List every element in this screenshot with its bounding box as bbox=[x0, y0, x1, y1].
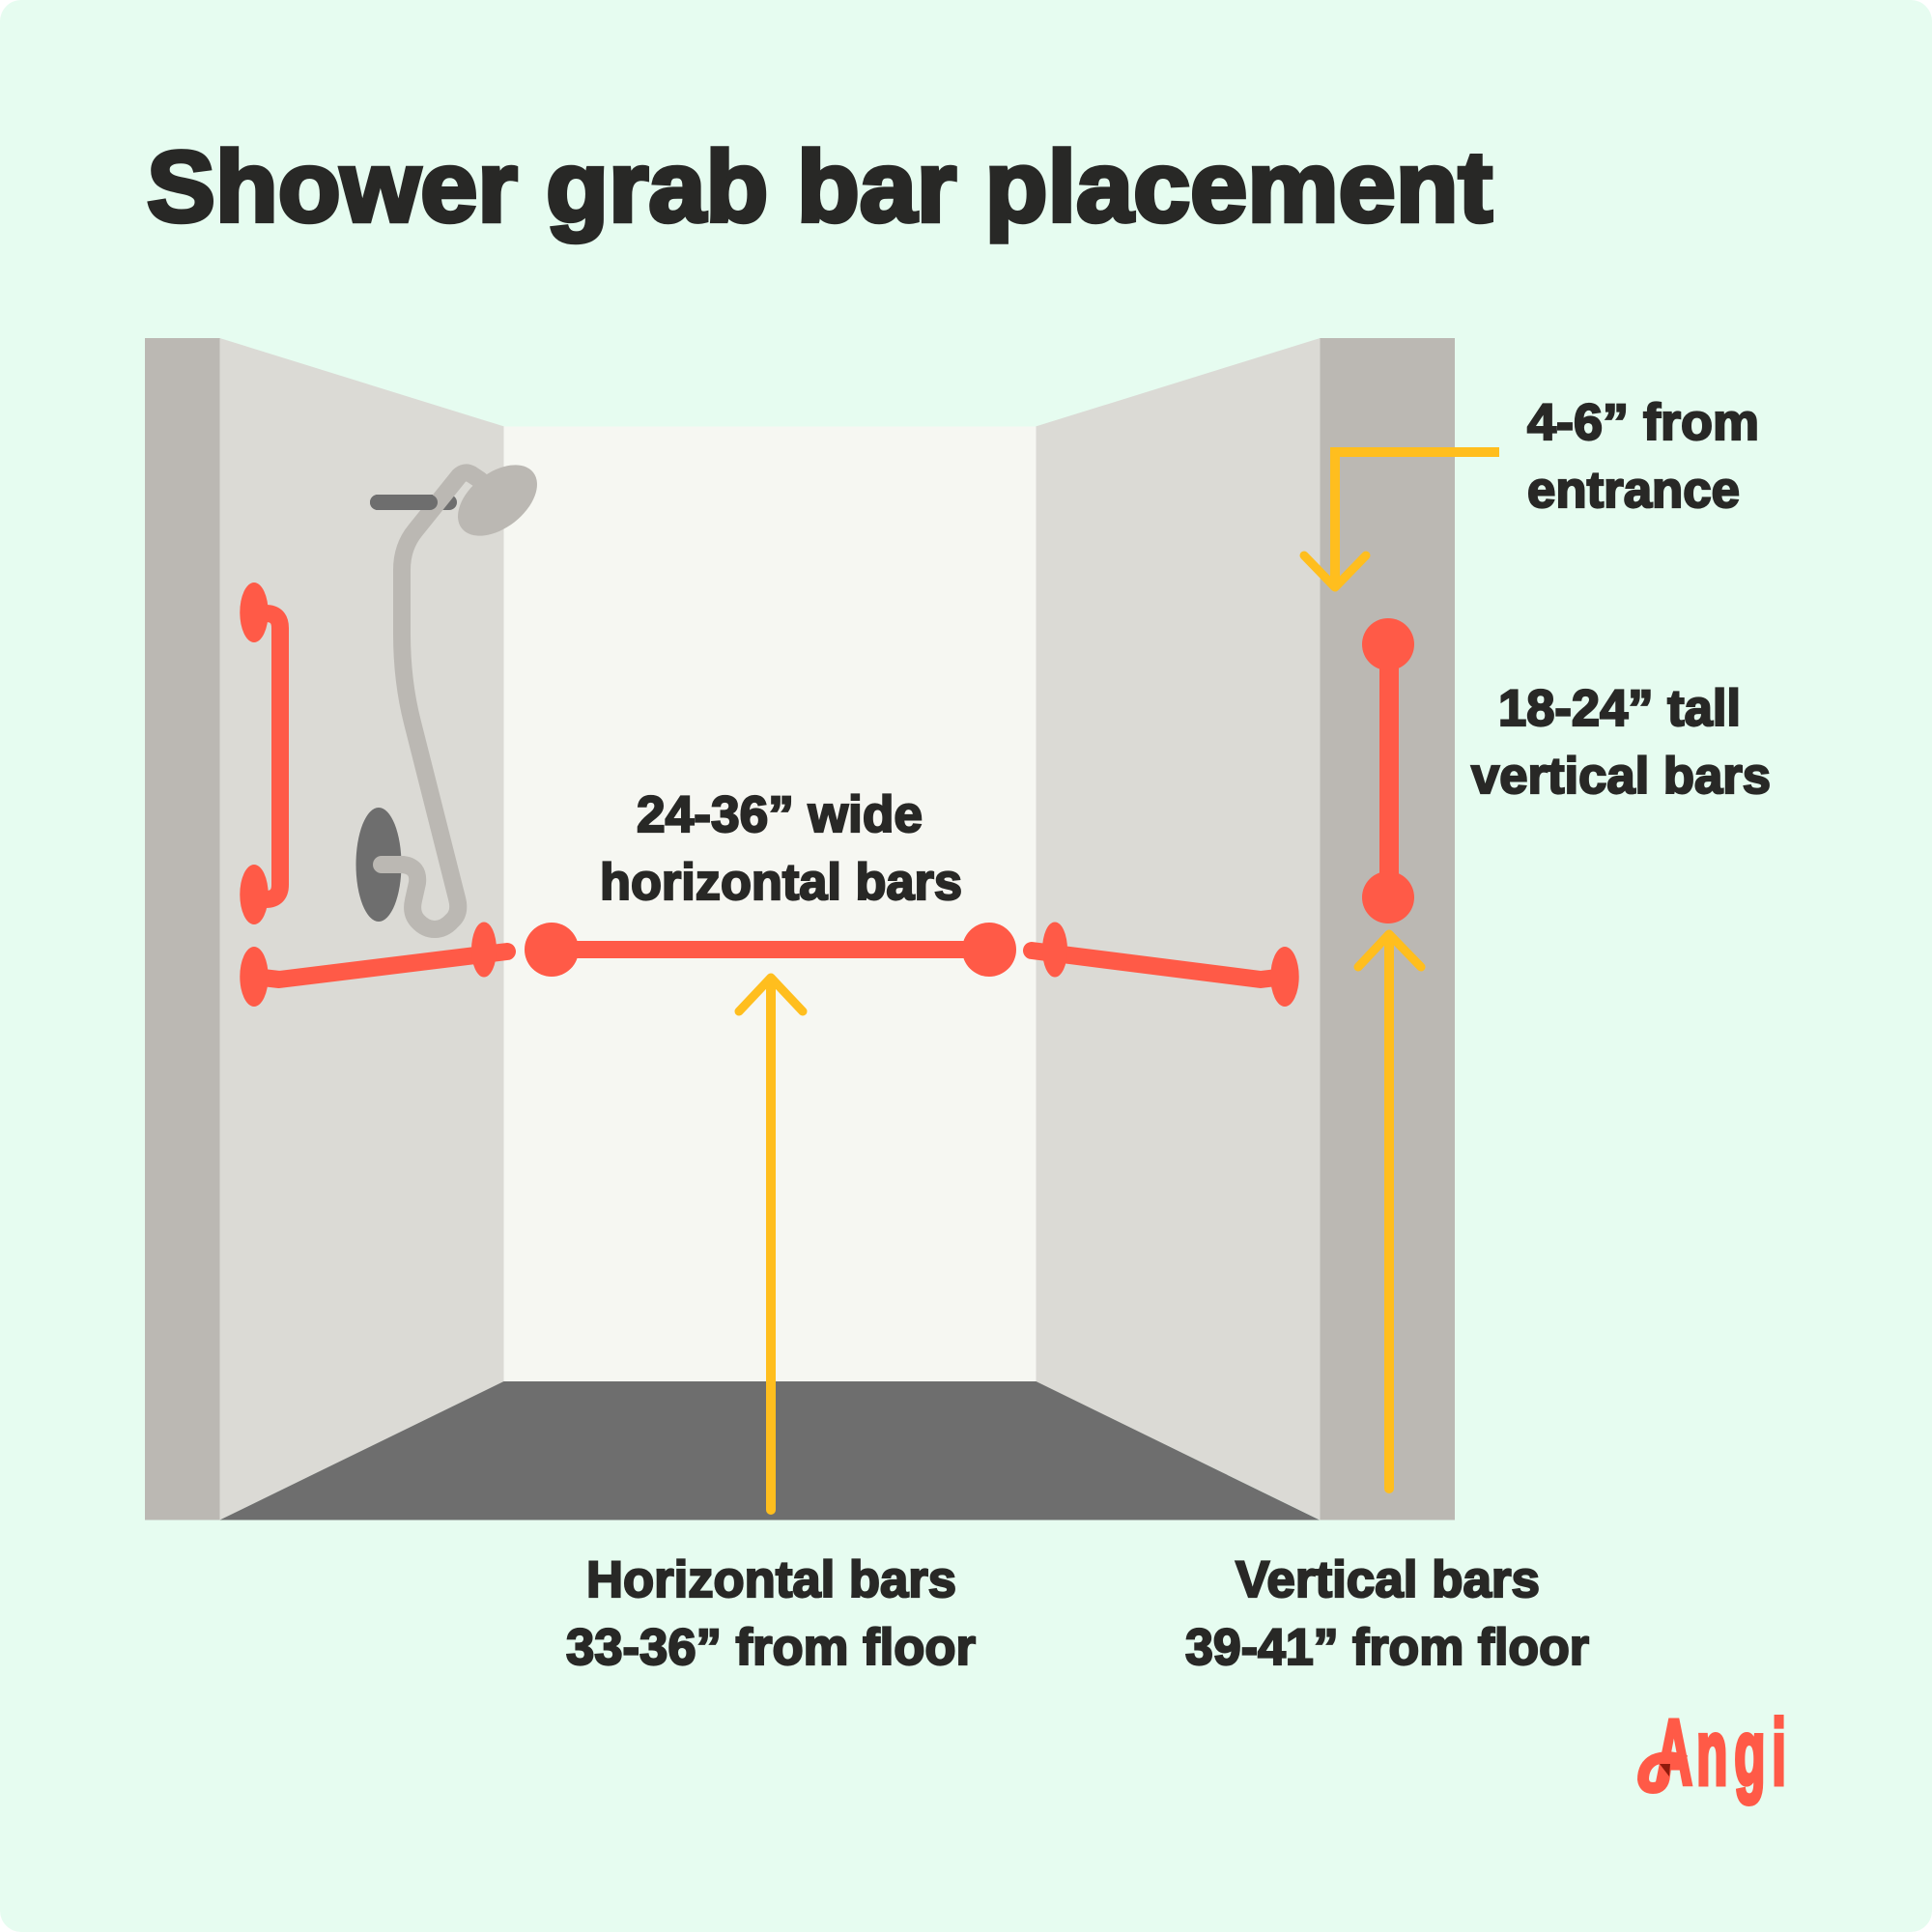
label: 24-36 inches wide horizontal bars: 24-36” wide bbox=[637, 786, 923, 843]
label: 4-6 inches from entrance: entrance bbox=[1527, 462, 1740, 519]
left wall vertical grab bar bbox=[240, 582, 280, 924]
right outer wall edge bbox=[1320, 338, 1455, 1520]
shower mount bar, rear part bbox=[378, 495, 449, 510]
left side wall bbox=[220, 338, 504, 1520]
label: horizontal bars 33-36 inches from floor: Horizontal bars bbox=[586, 1551, 956, 1608]
logo fold shadow bbox=[1660, 1764, 1670, 1776]
title: Shower grab bar placement bbox=[147, 131, 1492, 243]
label: vertical bars 39-41 inches from floor: 39-41” from floor bbox=[1185, 1619, 1589, 1676]
left outer wall edge bbox=[145, 338, 220, 1520]
label: 18-24 inches tall vertical bars: 18-24” tall bbox=[1498, 680, 1741, 737]
label: vertical bars 39-41 inches from floor bbox=[1185, 1551, 1589, 1676]
logo: Angi bbox=[1643, 1701, 1786, 1804]
back wall horizontal grab bar bbox=[525, 923, 1016, 977]
label: vertical bars 39-41 inches from floor: Vertical bars bbox=[1236, 1551, 1540, 1608]
floor bbox=[220, 1381, 1320, 1520]
arrow: horizontal bar height bbox=[739, 978, 803, 1510]
shower enclosure bbox=[145, 338, 1455, 1520]
right wall horizontal grab bar bbox=[1032, 922, 1299, 1007]
entrance wall vertical grab bar bbox=[1362, 618, 1414, 923]
shower valve plate bbox=[355, 808, 402, 922]
label: 18-24 inches tall vertical bars bbox=[1471, 680, 1771, 805]
shower hose and arm bbox=[382, 472, 480, 929]
label: horizontal bars 33-36 inches from floor: 33-36” from floor bbox=[566, 1619, 976, 1676]
arrow: vertical bar height bbox=[1358, 934, 1421, 1489]
label: 4-6 inches from entrance bbox=[1527, 394, 1759, 519]
right side wall bbox=[1036, 338, 1320, 1520]
back wall bbox=[504, 427, 1036, 1381]
shower head bbox=[444, 451, 551, 550]
label: 24-36 inches wide horizontal bars bbox=[600, 786, 962, 911]
shower mount bar, front part bbox=[378, 495, 430, 510]
arrow: 4-6 inches from entrance bbox=[1304, 452, 1499, 587]
icon: shower fixture bbox=[355, 451, 551, 929]
logo wordmark: Angi bbox=[1656, 1701, 1786, 1804]
left wall horizontal grab bar bbox=[240, 922, 507, 1007]
logo loop bbox=[1643, 1753, 1686, 1788]
label: horizontal bars 33-36 inches from floor bbox=[566, 1551, 976, 1676]
label: 4-6 inches from entrance: 4-6” from bbox=[1527, 394, 1759, 451]
label: 24-36 inches wide horizontal bars: horizontal bars bbox=[600, 854, 962, 911]
label: 18-24 inches tall vertical bars: vertical bars bbox=[1471, 748, 1771, 805]
